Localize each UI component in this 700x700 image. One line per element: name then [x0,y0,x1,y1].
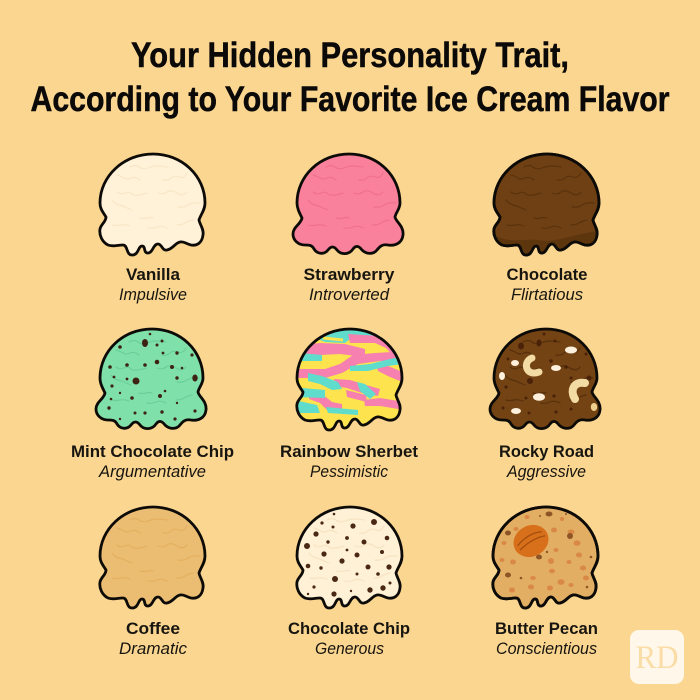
label: mint chocolate chip: Mint Chocolate Chip [71,442,234,461]
icon: butter pecan scoop [493,507,598,608]
label: chocolate [506,265,588,304]
label: vanilla: Impulsive [119,285,187,304]
label: chocolate chip: Chocolate Chip [288,619,410,638]
label: butter pecan: Butter Pecan [495,619,598,638]
label: chocolate: Flirtatious [511,285,583,304]
label: mint chocolate chip: Argumentative [98,462,206,481]
panel: mint chocolate chip [71,329,234,481]
label: rainbow sherbet: Rainbow Sherbet [280,442,418,461]
label: chocolate chip [288,619,410,658]
label: rainbow sherbet: Pessimistic [310,462,388,481]
icon: chocolate scoop [492,152,600,256]
label: vanilla: Vanilla [126,265,181,284]
icon: coffee scoop [100,507,205,608]
label: coffee [119,619,187,658]
panel: strawberry [293,154,403,304]
label: rocky road [499,442,594,481]
panel: butter pecan [493,507,598,658]
title [30,36,670,119]
label: chocolate chip: Generous [315,639,384,658]
label: rainbow sherbet [280,442,418,481]
panel: rainbow sherbet [280,327,418,481]
label: vanilla [119,265,187,304]
panel: coffee [100,507,205,658]
icon: chocolate chip scoop [297,507,402,608]
label: butter pecan [495,619,598,658]
icon: RD logo badge: RD [636,640,678,676]
label: strawberry: Strawberry [304,265,395,284]
label: chocolate: Chocolate [506,265,588,284]
icon: strawberry scoop [293,154,403,254]
icon: RD logo badge [630,630,684,684]
icon: rocky road scoop [490,329,600,429]
label: rocky road: Rocky Road [499,442,594,461]
label: mint chocolate chip [71,442,234,481]
icon: vanilla scoop [100,154,205,255]
icon: mint chocolate chip scoop [96,329,206,429]
panel: chocolate [492,152,600,300]
label: strawberry: Introverted [309,285,390,304]
label: coffee: Coffee [126,619,180,638]
label: rocky road: Aggressive [506,462,586,481]
panel: rocky road [490,329,600,481]
title: Your Hidden Personality Trait, [131,36,569,75]
panel: vanilla [100,154,205,304]
icon: pecan [508,519,554,563]
panel: chocolate chip [288,507,410,658]
label: butter pecan: Conscientious [496,639,597,658]
label: coffee: Dramatic [119,639,187,658]
icon: rainbow sherbet scoop [290,327,410,430]
label: strawberry [304,265,395,304]
